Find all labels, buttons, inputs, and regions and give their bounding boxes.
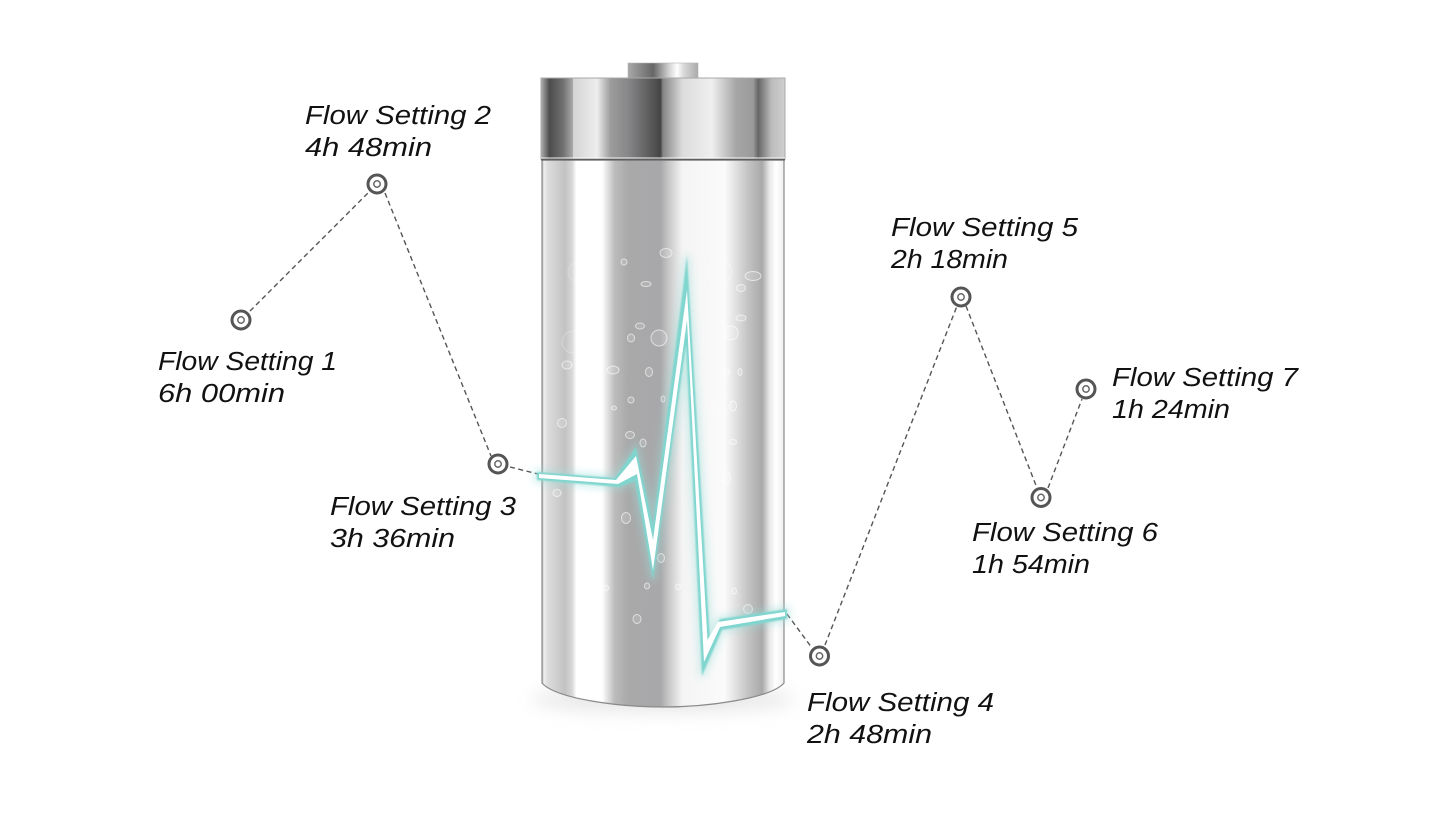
pulse wide glow xyxy=(537,256,787,676)
label: flow setting 6: Flow Setting 6 xyxy=(972,519,1159,547)
label: flow setting 5: Flow Setting 5 xyxy=(891,214,1079,242)
label: flow setting 2: 4h 48min xyxy=(305,134,432,162)
cap lower rim xyxy=(541,159,785,160)
label: flow setting 7: Flow Setting 7 xyxy=(1112,364,1299,392)
node 5 xyxy=(952,288,970,306)
label: flow setting 2: Flow Setting 2 xyxy=(305,102,491,130)
dashed connector: settings 4 to 7 xyxy=(787,306,1082,648)
battery cap xyxy=(541,78,785,159)
label: flow setting 3 xyxy=(330,493,516,553)
cap rim highlight xyxy=(541,157,785,158)
battery body xyxy=(542,160,784,707)
dashed connector: settings 1 to 3 xyxy=(250,192,538,474)
node 1 xyxy=(232,311,250,329)
node 3 xyxy=(489,455,507,473)
label: flow setting 3: Flow Setting 3 xyxy=(330,493,516,521)
label: flow setting 6: 1h 54min xyxy=(972,551,1090,579)
label: flow setting 4 xyxy=(806,689,994,749)
label: flow setting 7: 1h 24min xyxy=(1112,396,1230,424)
battery illustration xyxy=(531,63,795,712)
label: flow setting 3: 3h 36min xyxy=(330,525,455,553)
battery floor shadow xyxy=(531,686,795,712)
node 6 xyxy=(1032,488,1050,506)
node 2 xyxy=(368,175,386,193)
label: flow setting 2 xyxy=(305,102,491,162)
label: flow setting 1: Flow Setting 1 xyxy=(158,348,337,376)
label: flow setting 7 xyxy=(1112,364,1299,424)
node 4 xyxy=(810,647,828,665)
pulse white core xyxy=(539,290,785,662)
label: flow setting 1: 6h 00min xyxy=(158,380,285,408)
label: flow setting 5 xyxy=(890,214,1079,274)
label: flow setting 5: 2h 18min xyxy=(890,246,1008,274)
label: flow setting 1 xyxy=(158,348,337,408)
battery terminal xyxy=(628,63,698,78)
pulse teal outline xyxy=(537,256,787,676)
water bubbles xyxy=(553,248,761,624)
node 7 xyxy=(1077,380,1095,398)
label: flow setting 4: 2h 48min xyxy=(806,721,932,749)
label: flow setting 6 xyxy=(972,519,1159,579)
heartbeat pulse line xyxy=(537,256,787,676)
label: flow setting 4: Flow Setting 4 xyxy=(807,689,994,717)
